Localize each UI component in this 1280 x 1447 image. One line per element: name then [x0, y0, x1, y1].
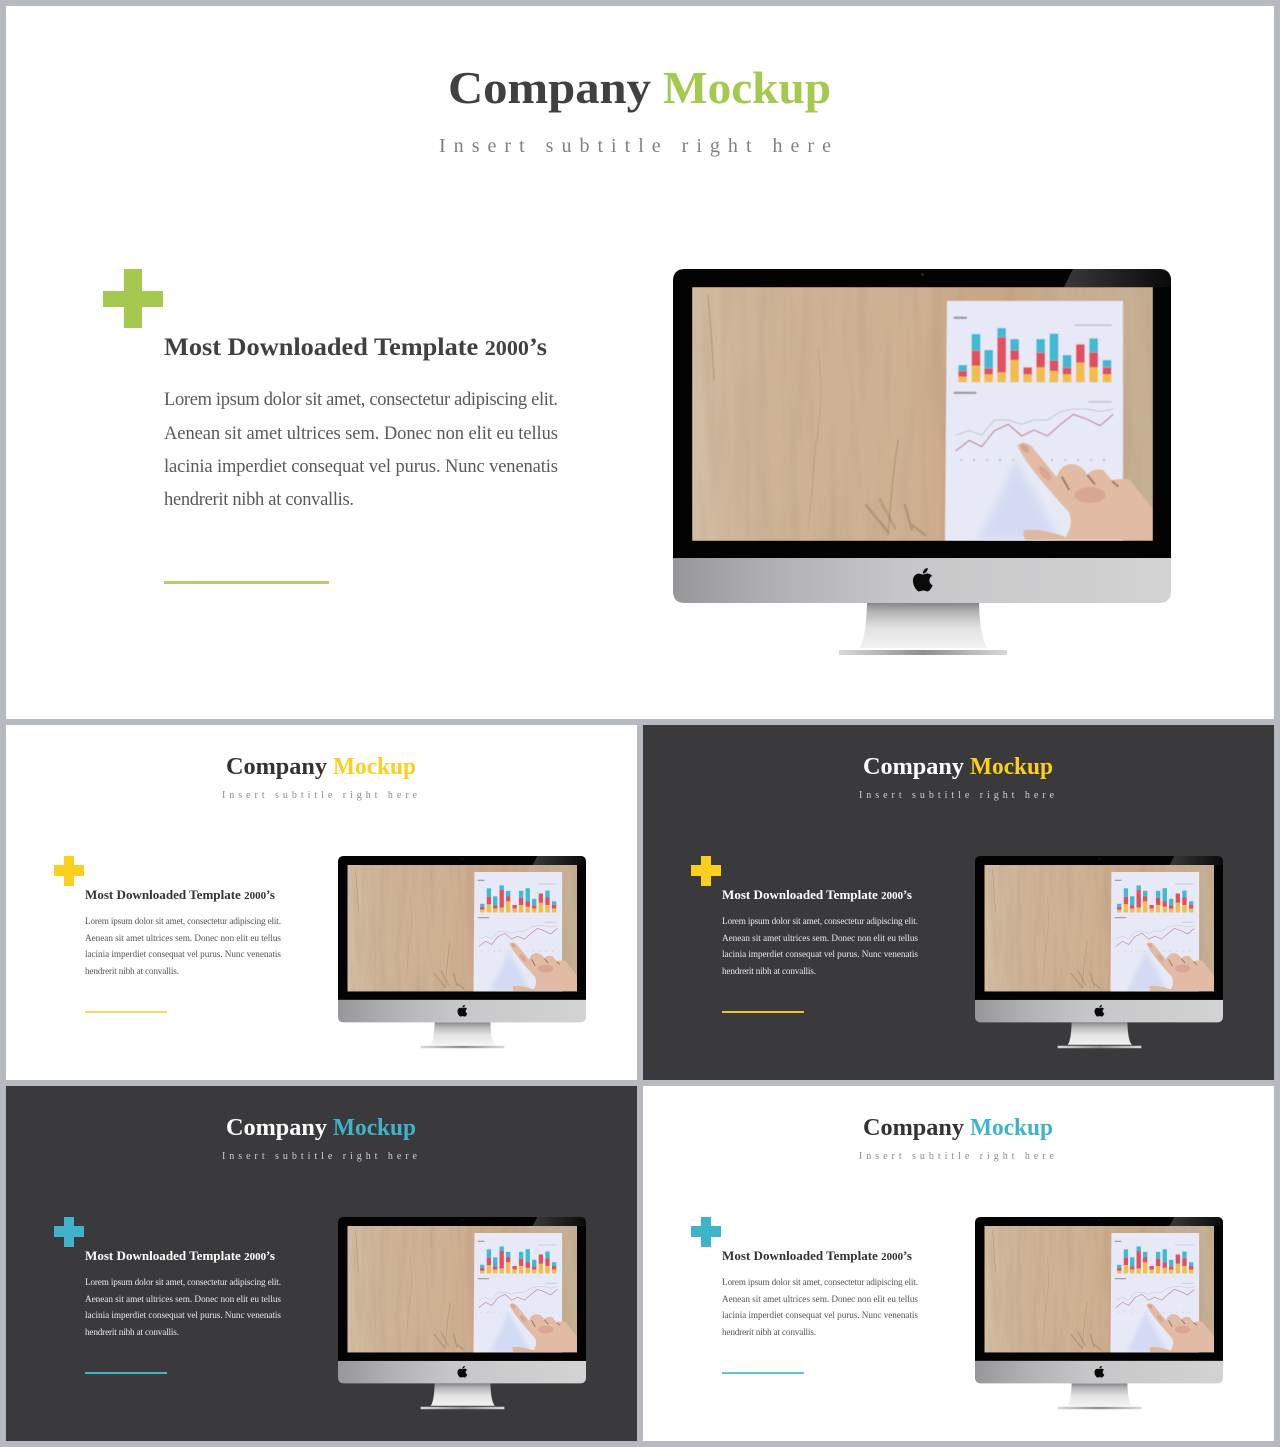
body text: lacinia imperdiet consequat vel purus. Nunc venenatis: [722, 1310, 918, 1320]
body text: [85, 916, 281, 976]
title: Company: [226, 754, 327, 780]
body text: lacinia imperdiet consequat vel purus. Nunc venenatis: [85, 1310, 281, 1320]
icon: iMac mockup: [673, 269, 1171, 655]
title: [863, 1115, 1053, 1141]
body text: Lorem ipsum dolor sit amet, consectetur adipiscing elit.: [722, 916, 918, 926]
icon: iMac mockup: [975, 856, 1223, 1048]
title: Company: [226, 1115, 327, 1141]
panel: large green slide: [6, 6, 1274, 719]
icon: yellow plus: [54, 856, 84, 886]
body text: Lorem ipsum dolor sit amet, consectetur adipiscing elit.: [722, 1277, 918, 1287]
subtitle: Insert subtitle right here: [222, 790, 418, 801]
body text: Lorem ipsum dolor sit amet, consectetur adipiscing elit.: [164, 390, 558, 410]
panel: yellow dark slide: [643, 725, 1274, 1080]
subtitle: Insert subtitle right here: [439, 135, 831, 157]
body text: lacinia imperdiet consequat vel purus. Nunc venenatis: [722, 949, 918, 959]
icon: blue plus: [54, 1217, 84, 1247]
body text: [722, 1277, 918, 1337]
title: Mockup: [333, 754, 416, 780]
body text: lacinia imperdiet consequat vel purus. Nunc venenatis: [85, 949, 281, 959]
title: Company: [448, 62, 651, 113]
title: [226, 754, 416, 780]
icon: iMac mockup: [975, 1217, 1223, 1409]
body text: Aenean sit amet ultrices sem. Donec non elit eu tellus: [85, 1294, 281, 1304]
title: [863, 754, 1053, 780]
body text: Lorem ipsum dolor sit amet, consectetur adipiscing elit.: [85, 916, 281, 926]
panel: blue dark slide: [6, 1086, 637, 1441]
heading: Most Downloaded Template 2000’s: [85, 888, 275, 902]
icon: blue plus: [691, 1217, 721, 1247]
accent rule: [164, 581, 329, 584]
title: Company: [863, 1115, 964, 1141]
body text: hendrerit nibh at convallis.: [85, 966, 179, 976]
subtitle: Insert subtitle right here: [859, 1151, 1055, 1162]
panel: blue light slide: [643, 1086, 1274, 1441]
heading: Most Downloaded Template 2000’s: [722, 888, 912, 902]
body text: [85, 1277, 281, 1337]
icon: yellow plus: [691, 856, 721, 886]
accent rule: [722, 1372, 804, 1374]
title: Mockup: [970, 1115, 1053, 1141]
heading: Most Downloaded Template 2000’s: [722, 1249, 912, 1263]
title: Mockup: [333, 1115, 416, 1141]
body text: Aenean sit amet ultrices sem. Donec non elit eu tellus: [722, 933, 918, 943]
heading: Most Downloaded Template 2000’s: [85, 1249, 275, 1263]
accent rule: [85, 1372, 167, 1374]
body text: Aenean sit amet ultrices sem. Donec non elit eu tellus: [722, 1294, 918, 1304]
icon: iMac mockup: [338, 856, 586, 1048]
body text: [164, 390, 558, 510]
subtitle: Insert subtitle right here: [222, 1151, 418, 1162]
body text: lacinia imperdiet consequat vel purus. Nunc venenatis: [164, 457, 558, 477]
body text: Aenean sit amet ultrices sem. Donec non elit eu tellus: [85, 933, 281, 943]
icon: iMac mockup: [338, 1217, 586, 1409]
body text: Aenean sit amet ultrices sem. Donec non elit eu tellus: [164, 424, 558, 444]
panel: yellow light slide: [6, 725, 637, 1080]
heading: Most Downloaded Template 2000’s: [164, 334, 547, 361]
title: Mockup: [970, 754, 1053, 780]
accent rule: [722, 1011, 804, 1013]
body text: hendrerit nibh at convallis.: [164, 490, 354, 510]
body text: Lorem ipsum dolor sit amet, consectetur adipiscing elit.: [85, 1277, 281, 1287]
body text: hendrerit nibh at convallis.: [85, 1327, 179, 1337]
subtitle: Insert subtitle right here: [859, 790, 1055, 801]
title: [226, 1115, 416, 1141]
icon: green plus: [103, 269, 163, 328]
accent rule: [85, 1011, 167, 1013]
title: [448, 62, 831, 113]
title: Company: [863, 754, 964, 780]
title: Mockup: [663, 62, 831, 113]
body text: hendrerit nibh at convallis.: [722, 1327, 816, 1337]
body text: hendrerit nibh at convallis.: [722, 966, 816, 976]
body text: [722, 916, 918, 976]
